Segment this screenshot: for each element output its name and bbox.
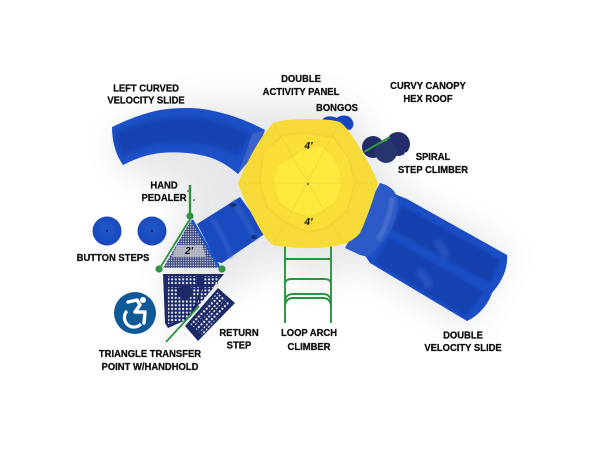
label: hand pedaler: PEDALER bbox=[141, 193, 187, 204]
roof centre point bbox=[307, 183, 309, 185]
height label top: 4′ bbox=[304, 141, 313, 152]
label: loop arch climber bbox=[281, 328, 337, 353]
return step bbox=[185, 288, 235, 341]
label: left curved velocity slide: VELOCITY SLIDE bbox=[107, 95, 185, 107]
label: spiral step climber bbox=[398, 152, 468, 176]
canopy pole bbox=[364, 137, 390, 152]
button step right bbox=[138, 216, 166, 246]
connector tube to transfer point bbox=[197, 197, 266, 263]
label: curvy canopy hex roof: CURVY CANOPY bbox=[390, 81, 466, 92]
label: bongos: BONGOS bbox=[316, 103, 358, 114]
label: loop arch climber: LOOP ARCH bbox=[281, 328, 337, 339]
loop arch climber bbox=[285, 245, 331, 323]
height label bottom: 4′ bbox=[304, 217, 313, 228]
hand pedaler bbox=[187, 185, 195, 214]
label: hand pedaler: HAND bbox=[150, 180, 178, 192]
label: triangle transfer point: TRIANGLE TRANSFER bbox=[99, 349, 201, 360]
label: spiral step climber: SPIRAL bbox=[416, 152, 450, 163]
label: return step: STEP bbox=[227, 340, 252, 352]
spiral step climber bbox=[362, 132, 410, 164]
ground shadow bbox=[112, 100, 510, 345]
label: curvy canopy hex roof: HEX ROOF bbox=[403, 94, 453, 105]
triangle transfer point bbox=[155, 212, 226, 273]
label: return step bbox=[219, 328, 259, 352]
label: double velocity slide: VELOCITY SLIDE bbox=[424, 343, 502, 354]
label: triangle transfer point bbox=[99, 349, 201, 373]
label: spiral step climber: STEP CLIMBER bbox=[398, 165, 468, 176]
left curved velocity slide bbox=[112, 108, 265, 174]
icon: accessibility bbox=[114, 292, 156, 334]
transfer deck bbox=[163, 274, 224, 342]
deck height label: 2′ bbox=[184, 246, 194, 257]
label: double activity panel: DOUBLE bbox=[281, 74, 321, 85]
label: curvy canopy hex roof bbox=[390, 81, 466, 105]
yellow hex roof bbox=[238, 119, 378, 248]
label: hand pedaler bbox=[141, 180, 187, 204]
button step left bbox=[92, 216, 122, 246]
label: double activity panel: ACTIVITY PANEL bbox=[263, 87, 339, 98]
label: left curved velocity slide: LEFT CURVED bbox=[113, 83, 179, 95]
label: button steps: BUTTON STEPS bbox=[77, 253, 150, 264]
label: double activity panel bbox=[263, 74, 339, 98]
label: triangle transfer point: POINT W/HANDHOLD bbox=[102, 362, 198, 373]
label: double velocity slide bbox=[424, 330, 502, 354]
double velocity slide bbox=[345, 183, 507, 321]
label: loop arch climber: CLIMBER bbox=[288, 342, 330, 353]
bongos bbox=[322, 116, 353, 130]
label: double velocity slide: DOUBLE bbox=[443, 330, 483, 342]
label: return step: RETURN bbox=[219, 328, 259, 339]
label: left curved velocity slide bbox=[107, 83, 185, 107]
